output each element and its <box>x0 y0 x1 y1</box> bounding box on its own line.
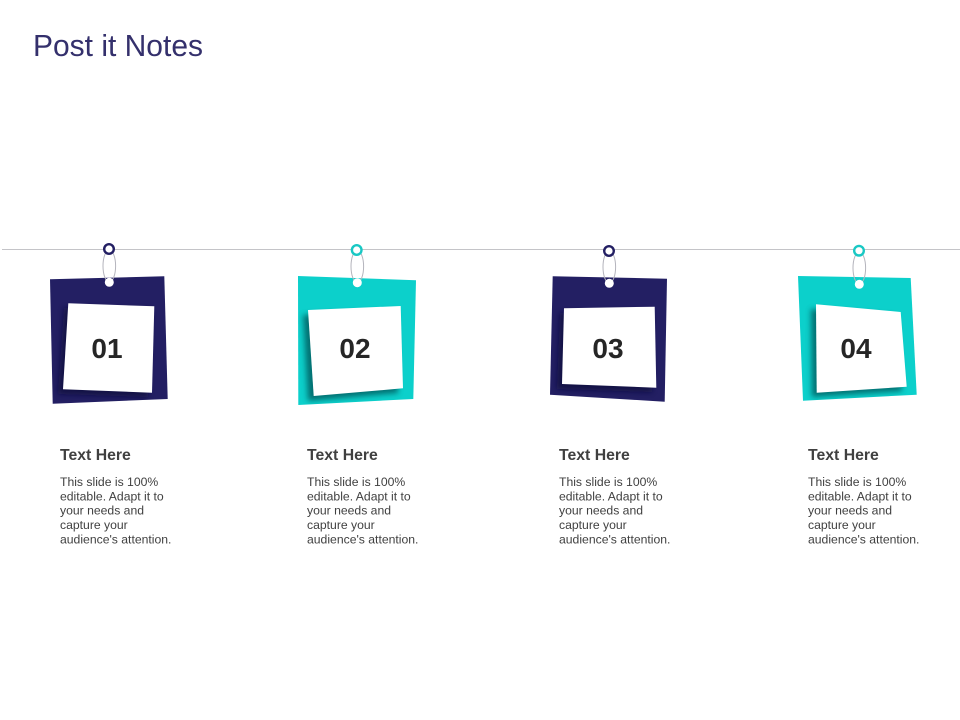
text block 4 body: capture your <box>808 518 876 532</box>
text block 4 body: audience's attention. <box>808 532 919 546</box>
note 1 pin ring <box>104 244 114 254</box>
text block 4 heading: Text Here <box>808 447 879 464</box>
text block 3 body: audience's attention. <box>559 532 670 546</box>
note 4 hole <box>855 280 864 289</box>
note 4 number: 04 <box>840 333 872 364</box>
text block 2 body: This slide is 100% <box>307 475 405 489</box>
note 3 backing sheet <box>550 276 667 402</box>
note 2 number: 02 <box>339 333 371 364</box>
note 1 backing sheet <box>50 276 168 404</box>
note 1 hole <box>105 278 114 287</box>
text block 1 body: editable. Adapt it to <box>60 489 164 503</box>
note 4 white paper <box>816 304 907 393</box>
text block 4 <box>808 447 919 546</box>
text block 4 body: This slide is 100% <box>808 475 906 489</box>
note 2 string loop <box>351 250 364 282</box>
text block 3 body: editable. Adapt it to <box>559 489 663 503</box>
text block 1 body: This slide is 100% <box>60 475 158 489</box>
note 4 shadow <box>811 309 902 397</box>
text block 2 <box>307 447 418 546</box>
note 4 string loop <box>853 252 866 284</box>
text block 2 body: capture your <box>307 518 375 532</box>
text block 2 heading: Text Here <box>307 447 378 464</box>
note 3 white paper <box>562 307 656 388</box>
text block 3 heading: Text Here <box>559 447 630 464</box>
note 2 white paper <box>308 306 403 396</box>
text block 1 heading: Text Here <box>60 447 131 464</box>
note 2 pin ring <box>352 245 362 255</box>
text block 2 body: audience's attention. <box>307 532 418 546</box>
note 3 pin ring <box>604 246 614 256</box>
note 1 <box>50 244 168 404</box>
note 3 number: 03 <box>592 333 624 364</box>
note 2 hole <box>353 278 362 287</box>
text block 2 body: your needs and <box>307 504 391 518</box>
title: Post it Notes <box>33 28 203 63</box>
text block 1 body: your needs and <box>60 504 144 518</box>
text block 3 body: This slide is 100% <box>559 475 657 489</box>
text block 4 body: editable. Adapt it to <box>808 489 912 503</box>
note 3 shadow <box>557 311 652 392</box>
note 1 number: 01 <box>91 333 123 364</box>
text block 4 body: your needs and <box>808 504 892 518</box>
note 4 <box>798 246 917 401</box>
text block 1 <box>60 447 171 546</box>
hanging line <box>2 248 960 250</box>
text block 3 body: capture your <box>559 518 627 532</box>
note 2 <box>298 245 416 405</box>
note 1 white paper <box>63 303 154 393</box>
text block 2 body: editable. Adapt it to <box>307 489 411 503</box>
note 3 string loop <box>603 251 616 283</box>
note 1 shadow <box>58 308 150 397</box>
note 4 backing sheet <box>798 276 917 401</box>
text block 1 body: audience's attention. <box>60 532 171 546</box>
note 2 shadow <box>303 311 398 401</box>
note 1 string loop <box>103 250 116 282</box>
text block 3 <box>559 447 670 546</box>
note 3 hole <box>605 279 614 288</box>
note 4 pin ring <box>854 246 864 256</box>
text block 3 body: your needs and <box>559 504 643 518</box>
text block 1 body: capture your <box>60 518 128 532</box>
note 2 backing sheet <box>298 276 416 405</box>
note 3 <box>550 246 667 402</box>
